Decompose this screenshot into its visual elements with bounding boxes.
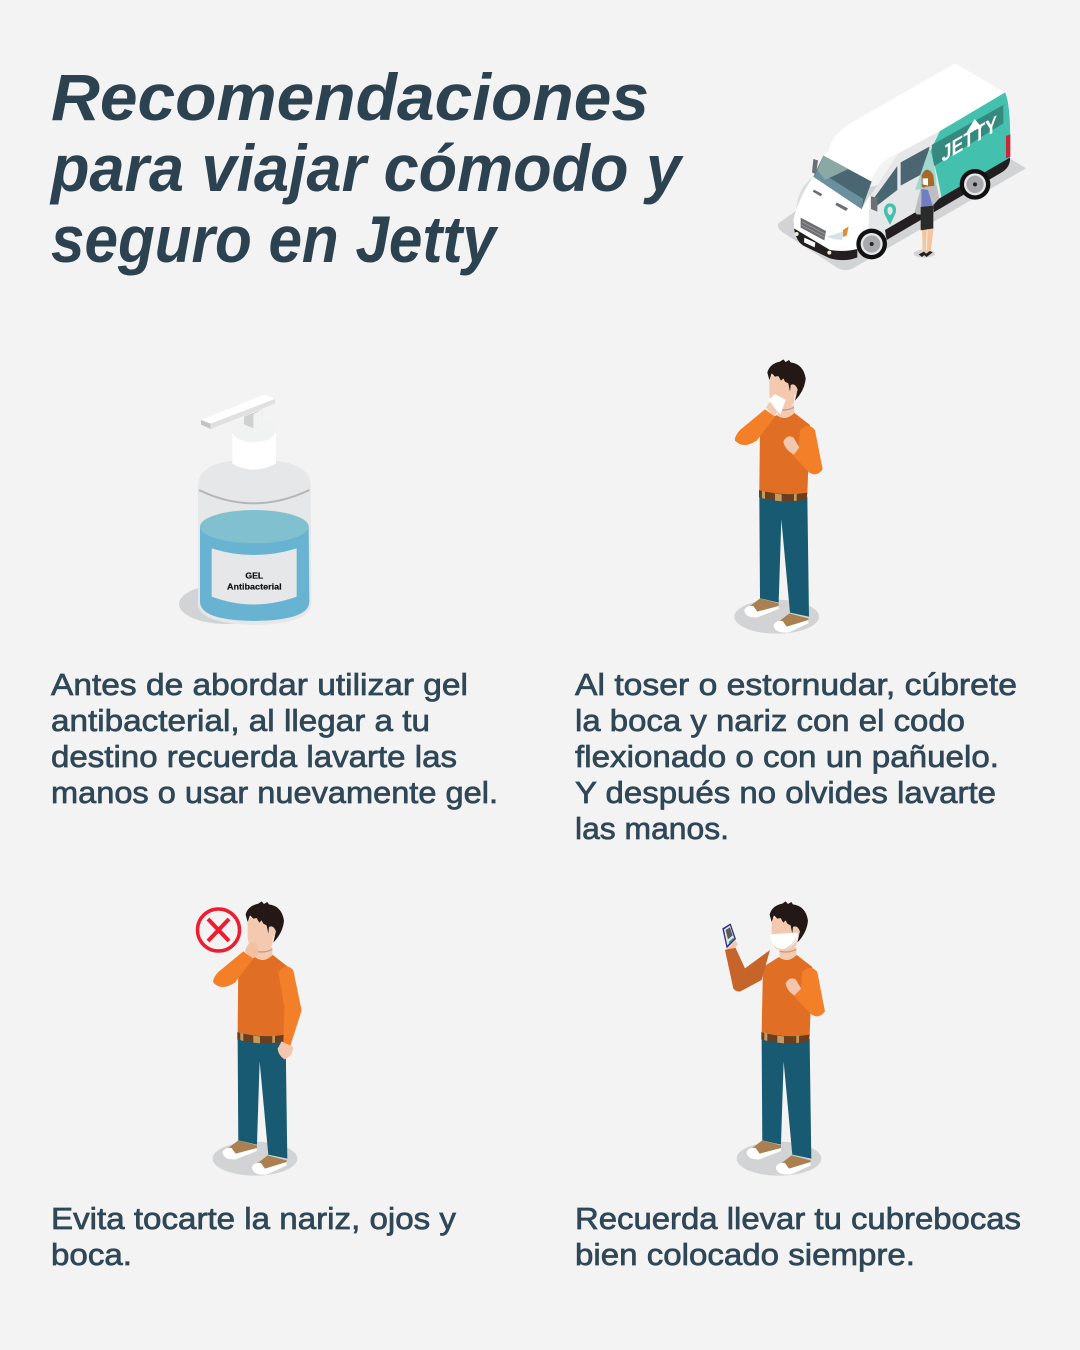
- text: gel recommendation: Antes de abordar utilizar gel: [51, 667, 468, 702]
- logo: JETTY on the van: JETTY: [942, 111, 997, 168]
- text: gel recommendation: [51, 667, 498, 810]
- illustration: man coughing into tissue: [734, 359, 823, 634]
- bottle label: GEL: [245, 570, 264, 580]
- text: cough recommendation: flexionado o con un pañuelo.: [575, 739, 999, 774]
- text: face mask recommendation: bien colocado siempre.: [575, 1237, 915, 1272]
- title: seguro en Jetty: [51, 202, 499, 276]
- rear wheel: [960, 169, 990, 200]
- illustration: man with mask and phone: [722, 901, 825, 1176]
- illustration: antibacterial gel bottle: [179, 394, 311, 625]
- icon: phone with QR code: [722, 923, 738, 949]
- bottle label: [212, 548, 297, 604]
- title: [49, 60, 684, 276]
- text: cough recommendation: [575, 667, 1017, 846]
- text: cough recommendation: Y después no olvides lavarte: [575, 775, 996, 810]
- text: face mask recommendation: Recuerda llevar tu cubrebocas: [575, 1201, 1021, 1236]
- text: avoid touching face: boca.: [51, 1237, 132, 1272]
- front wheel: [856, 229, 887, 259]
- text: avoid touching face: Evita tocarte la nariz, ojos y: [51, 1201, 457, 1236]
- windshield: [813, 156, 872, 209]
- text: avoid touching face: [51, 1201, 457, 1272]
- pump: [201, 394, 276, 470]
- text: cough recommendation: la boca y nariz con el codo: [575, 703, 965, 738]
- icon: red prohibition cross: [198, 909, 240, 951]
- icon: location pin: [884, 203, 896, 225]
- illustration: Jetty van with woman: [778, 63, 1026, 270]
- text: gel recommendation: antibacterial, al llegar a tu: [51, 703, 430, 738]
- woman with mask: [914, 170, 939, 258]
- title: para viajar cómodo y: [49, 131, 684, 205]
- text: cough recommendation: Al toser o estornudar, cúbrete: [575, 667, 1017, 702]
- hood and front body: [793, 177, 870, 252]
- text: gel recommendation: manos o usar nuevamente gel.: [51, 775, 498, 810]
- text: gel recommendation: destino recuerda lavarte las: [51, 739, 457, 774]
- bumper: [793, 218, 857, 260]
- bottle label: Antibacterial: [227, 581, 282, 591]
- illustration: man touching face: [213, 901, 302, 1176]
- text: cough recommendation: las manos.: [575, 811, 729, 846]
- title: Recomendaciones: [51, 60, 649, 134]
- text: face mask recommendation: [575, 1201, 1021, 1272]
- face mask: [770, 933, 798, 949]
